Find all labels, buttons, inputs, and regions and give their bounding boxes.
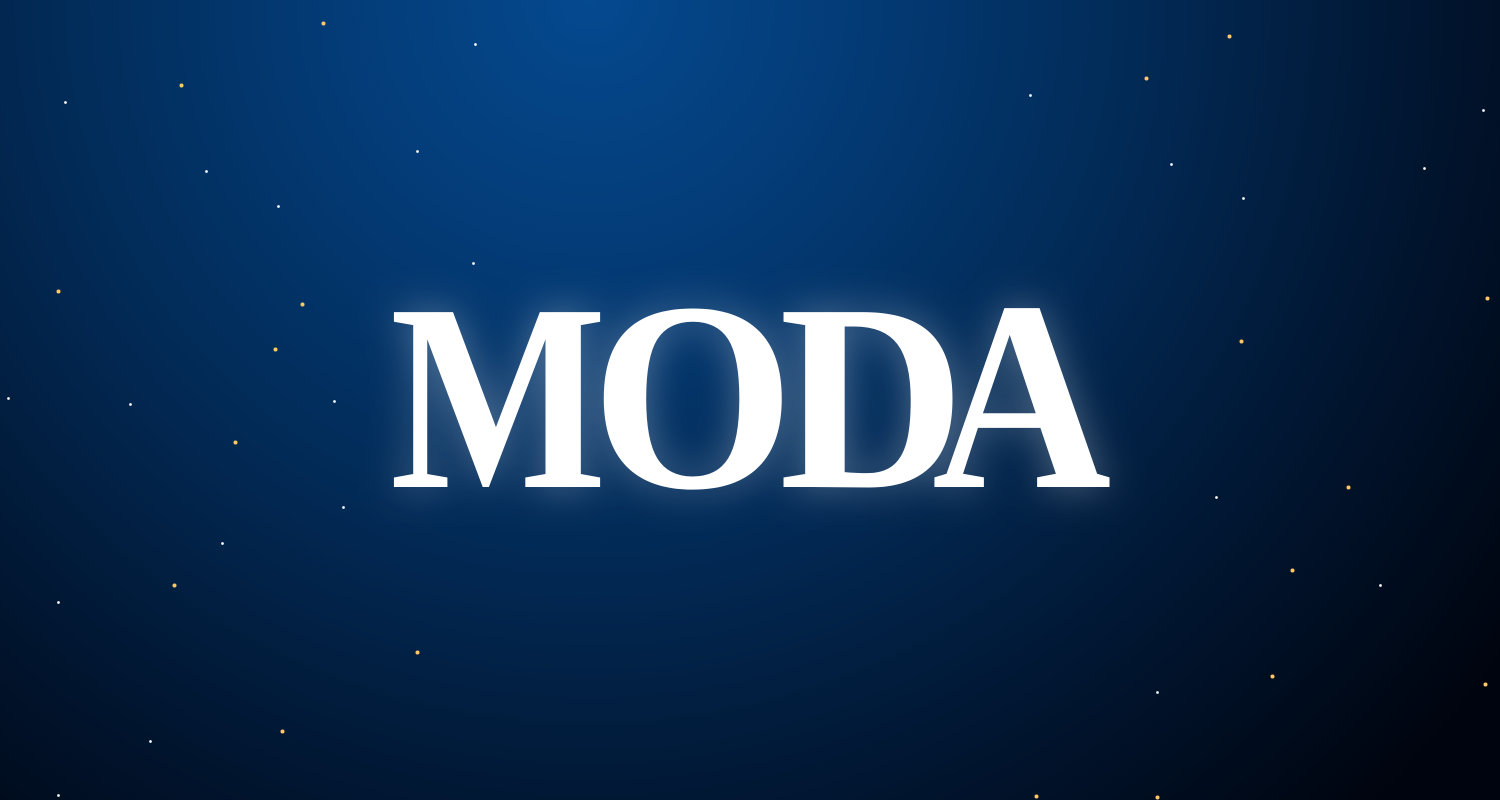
- title: MODA: D: [779, 249, 965, 545]
- title: MODA: O: [591, 247, 795, 546]
- title: MODA: A: [932, 246, 1111, 546]
- title: MODA: M: [390, 249, 607, 545]
- title: MODA: [390, 246, 1111, 546]
